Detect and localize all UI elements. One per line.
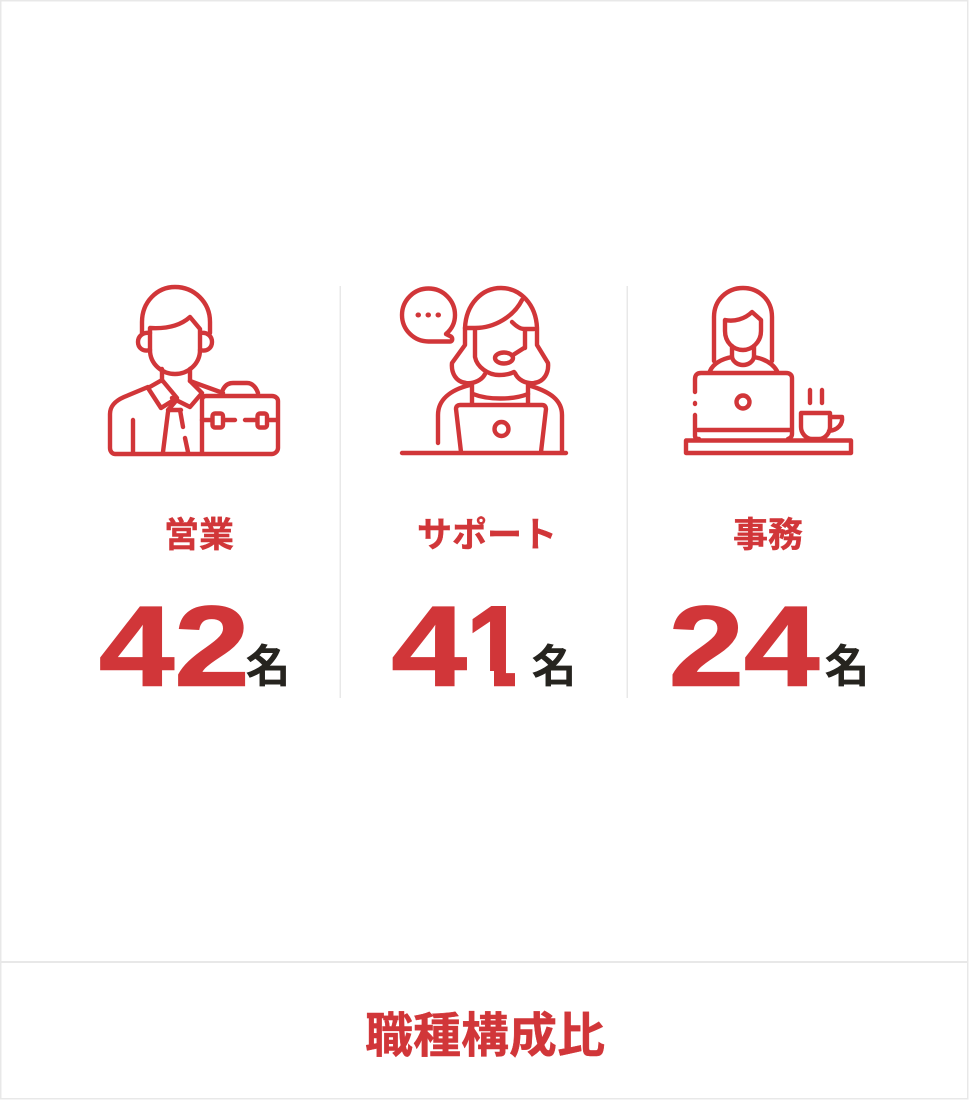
unit: 名: 名 <box>532 641 577 692</box>
unit: 名: 名 <box>824 641 870 692</box>
number: 41: 1 <box>466 583 525 710</box>
label: サポート: サポート <box>417 516 557 555</box>
number: 41: 4 <box>392 583 467 710</box>
icon: salesperson with briefcase <box>110 287 278 454</box>
number: 24: 24 <box>669 583 819 710</box>
icon: support operator with laptop <box>402 288 566 453</box>
column: sales <box>99 287 291 710</box>
column: support <box>392 288 577 710</box>
column: office <box>669 288 870 710</box>
title: 職種構成比: 職種構成比 <box>365 1010 605 1063</box>
unit: 名: 名 <box>246 641 291 692</box>
number: 42: 42 <box>99 583 250 710</box>
number: 41 <box>392 583 547 710</box>
label: 事務: 事務 <box>733 516 803 555</box>
icon: office worker with laptop and coffee <box>686 288 851 453</box>
label: 営業: 営業 <box>164 516 234 555</box>
